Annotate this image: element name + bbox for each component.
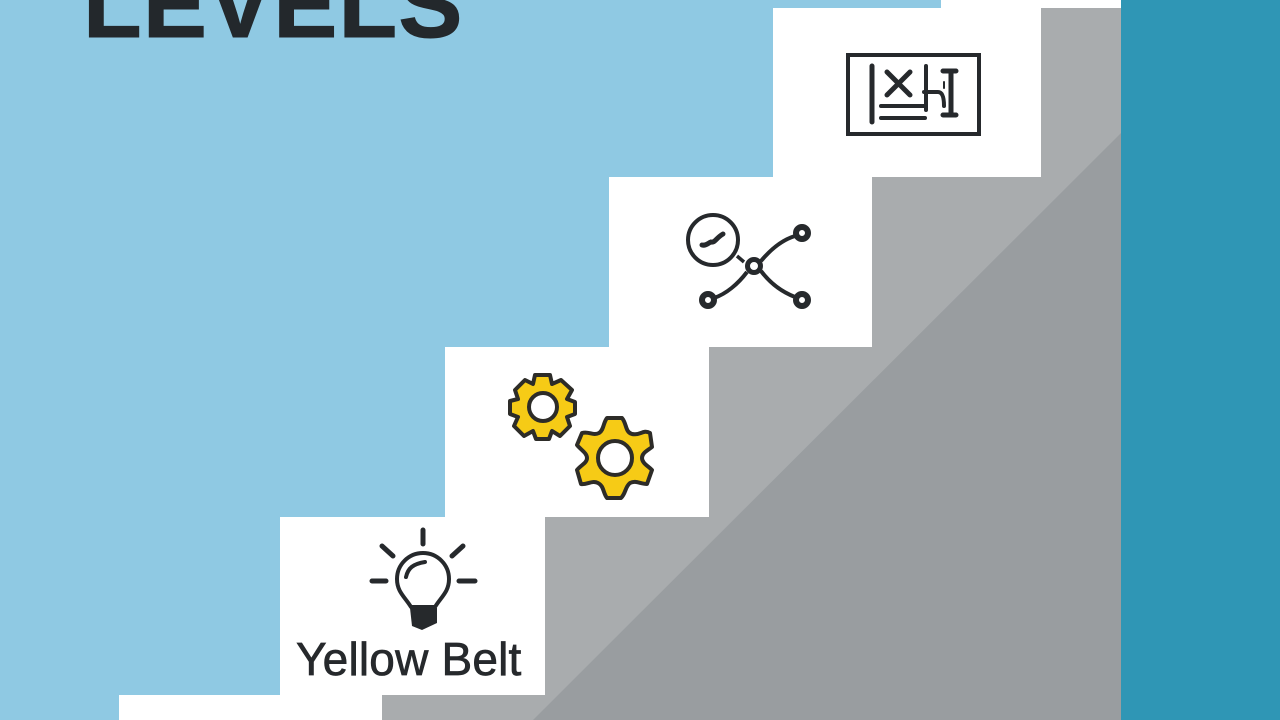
step 3	[445, 347, 709, 517]
staircase	[119, 0, 1121, 720]
staircase shadow: dark grey diagonal	[533, 133, 1121, 720]
large gear	[577, 418, 652, 498]
step 4	[609, 177, 872, 347]
step 2: yellow belt	[280, 517, 545, 695]
icon: blueprint frame	[848, 55, 979, 134]
step 6	[941, 0, 1121, 8]
icon: light bulb	[372, 530, 475, 630]
panel: right teal band	[1121, 0, 1280, 720]
label: Yellow Belt: Yellow Belt	[296, 633, 522, 685]
small gear	[510, 375, 575, 439]
staircase shadow: light grey	[382, 8, 1121, 720]
step 5	[773, 8, 1041, 177]
step 1	[119, 695, 382, 720]
icon: gears	[510, 375, 652, 498]
icon: network with magnifier	[688, 215, 808, 306]
